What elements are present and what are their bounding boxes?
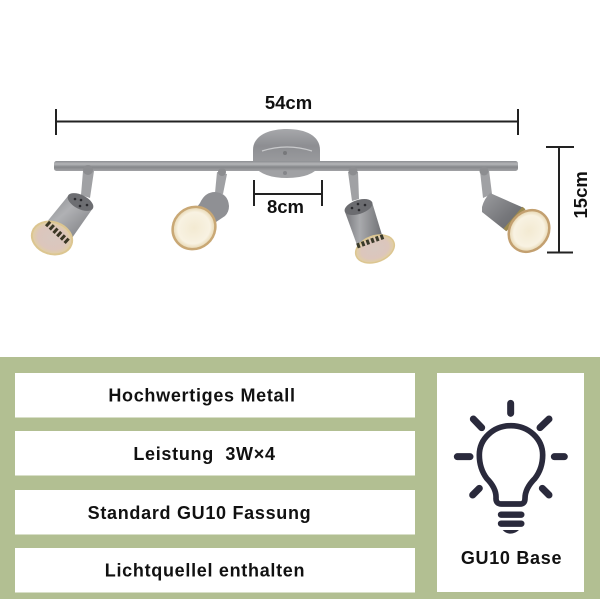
dimension: total width 54cm — [56, 92, 518, 135]
feature row: light source: Lichtquellel enthalten — [105, 560, 305, 580]
caption: GU10 Base: GU10 Base — [461, 548, 562, 568]
lamp: spotlight 3 — [343, 166, 398, 268]
dimension: height 15cm — [546, 147, 591, 252]
feature row: material: Hochwertiges Metall — [108, 386, 296, 406]
lamp: spotlight 1 — [28, 165, 96, 260]
dimension: height 15cm: 15cm — [570, 171, 591, 218]
panel: green background — [0, 357, 600, 600]
icon: light bulb — [457, 403, 564, 534]
lamp: spotlight 2 — [164, 168, 229, 258]
feature row: material — [15, 373, 415, 418]
lamp: ceiling canopy — [253, 129, 321, 178]
dimension: canopy width 8cm: 8cm — [267, 196, 304, 217]
feature row: power: Leistung 3W×4 — [133, 444, 276, 464]
feature row: socket — [15, 490, 415, 534]
lamp: spotlight 4 — [480, 166, 558, 260]
feature row: socket: Standard GU10 Fassung — [88, 503, 311, 523]
lamp: horizontal bar — [54, 161, 518, 171]
dimension: canopy width 8cm — [254, 180, 322, 217]
dimension: total width 54cm: 54cm — [265, 92, 312, 113]
panel: GU10 base — [437, 373, 584, 592]
feature row: light source — [15, 548, 415, 592]
feature row: power — [15, 431, 415, 476]
